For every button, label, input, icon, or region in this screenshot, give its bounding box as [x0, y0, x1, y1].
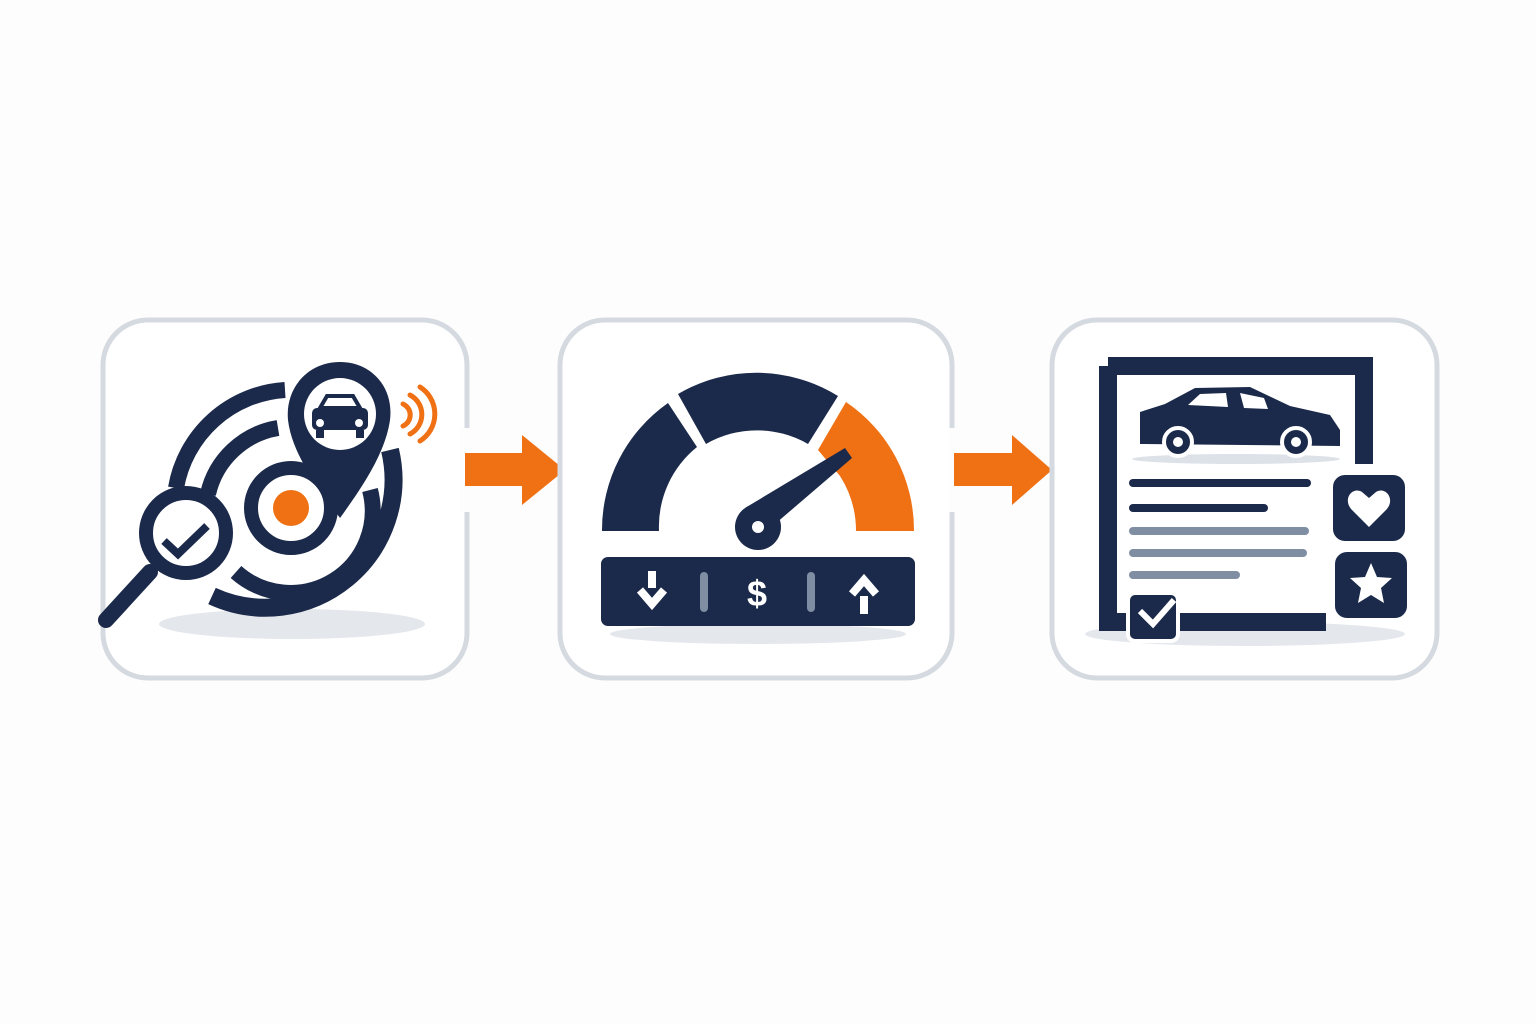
badge: star: [1333, 550, 1409, 620]
gauge: [602, 373, 914, 531]
panel: locate: [103, 320, 467, 678]
document frame: [1108, 366, 1364, 622]
arrow 1: [460, 428, 565, 512]
icon: location pin with car: [288, 362, 390, 518]
shadow: [159, 609, 425, 639]
badge: heart: [1331, 473, 1407, 543]
icon: signal waves: [403, 387, 435, 441]
price bar: $: [747, 573, 767, 614]
car: [1132, 387, 1340, 464]
arrow 2: [949, 428, 1052, 512]
icon: magnifier with check: [106, 493, 226, 620]
text lines: [1133, 483, 1307, 575]
panel: listing: [1052, 320, 1437, 678]
icon: radar arcs: [176, 390, 393, 608]
price bar: [601, 557, 915, 626]
shadow: [1085, 622, 1405, 646]
shadow: [610, 624, 906, 644]
panel: price gauge: [560, 320, 952, 678]
needle: [735, 448, 852, 550]
badge: check: [1128, 593, 1178, 641]
